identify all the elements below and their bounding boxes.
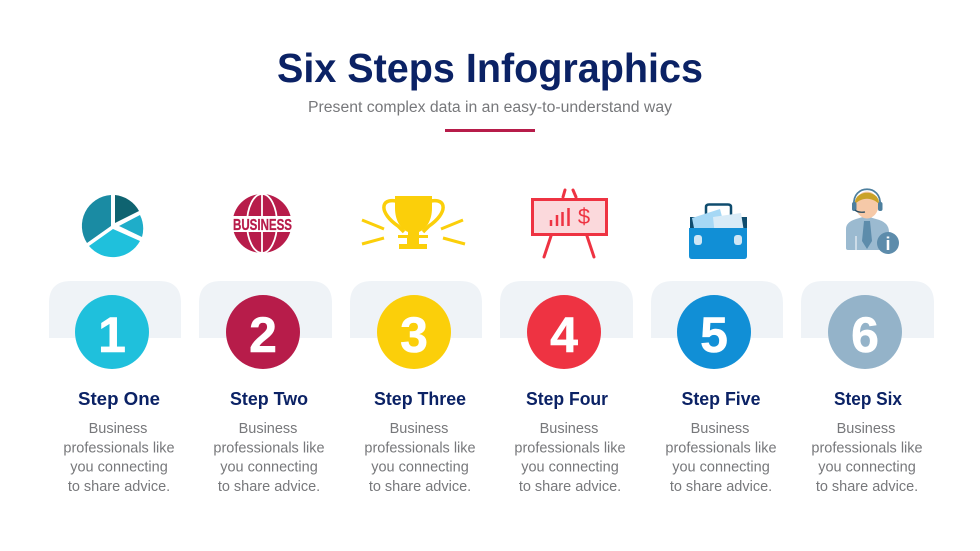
step 4 text: you connecting (521, 460, 619, 476)
step 5 (651, 281, 783, 495)
step 2 badge (226, 295, 300, 369)
step 4 text: professionals like (514, 440, 626, 456)
step 4 text (514, 421, 626, 495)
step 4 badge: 4 (550, 307, 578, 363)
step 5 panel (651, 281, 783, 338)
step 5 text: Business (691, 421, 749, 437)
step 1 heading: Step One (78, 389, 160, 409)
title underline (445, 129, 535, 132)
step 2 text: you connecting (220, 460, 318, 476)
step 6 text: Business (837, 421, 895, 437)
step 4 text: Business (540, 421, 598, 437)
step 5 text: professionals like (665, 440, 777, 456)
step 2 text (213, 421, 325, 495)
step 2 panel (199, 281, 332, 338)
step 3 text: to share advice. (369, 479, 471, 495)
step 4 (500, 281, 633, 495)
icon: business globe (232, 194, 293, 253)
step 3 text: Business (390, 421, 448, 437)
step 6 heading: Step Six (834, 389, 902, 409)
step 3 badge: 3 (400, 307, 428, 363)
step 5 heading: Step Five (682, 389, 760, 409)
icon: presentation board: $ (578, 204, 590, 229)
step 2 text: Business (239, 421, 297, 437)
step 1 text: you connecting (70, 460, 168, 476)
step 3 panel (350, 281, 482, 338)
icon: support agent: i (885, 234, 891, 254)
icon: support agent (846, 189, 899, 254)
icon: presentation board (532, 190, 606, 257)
icon: business globe: BUSINESS (233, 217, 292, 234)
title: Six Steps Infographics (277, 45, 703, 91)
step 6 text: professionals like (811, 440, 923, 456)
step 6 badge: 6 (851, 307, 879, 363)
step 4 heading: Step Four (526, 389, 608, 409)
step 1 text: to share advice. (68, 479, 170, 495)
step 5 text (665, 421, 777, 495)
icon: briefcase (689, 204, 747, 259)
step 5 text: to share advice. (670, 479, 772, 495)
step 1 text: Business (89, 421, 147, 437)
step 6 (801, 281, 934, 495)
icon: trophy (362, 196, 465, 249)
step 2 text: professionals like (213, 440, 325, 456)
icon: pie chart (82, 195, 143, 257)
step 4 panel (500, 281, 633, 338)
step 2 heading: Step Two (230, 389, 308, 409)
step 5 badge (677, 295, 751, 369)
step 3 (350, 281, 482, 495)
step 2 text: to share advice. (218, 479, 320, 495)
step 1 (49, 281, 181, 495)
step 6 text: to share advice. (816, 479, 918, 495)
step 6 panel (801, 281, 934, 338)
step 3 text: you connecting (371, 460, 469, 476)
step 3 heading: Step Three (374, 389, 466, 409)
step 2 (199, 281, 332, 495)
step 5 text: you connecting (672, 460, 770, 476)
step 1 badge (75, 295, 149, 369)
step 1 text: professionals like (63, 440, 175, 456)
step 6 text: you connecting (818, 460, 916, 476)
step 3 badge (377, 295, 451, 369)
subtitle: Present complex data in an easy-to-understand way (308, 99, 672, 116)
step 3 text: professionals like (364, 440, 476, 456)
step 6 badge (828, 295, 902, 369)
step 1 badge: 1 (98, 307, 126, 363)
step 5 badge: 5 (700, 307, 728, 363)
step 4 badge (527, 295, 601, 369)
step 4 text: to share advice. (519, 479, 621, 495)
step 2 badge: 2 (249, 307, 277, 363)
step 6 text (811, 421, 923, 495)
step 1 text (63, 421, 175, 495)
step 1 panel (49, 281, 181, 338)
step 3 text (364, 421, 476, 495)
